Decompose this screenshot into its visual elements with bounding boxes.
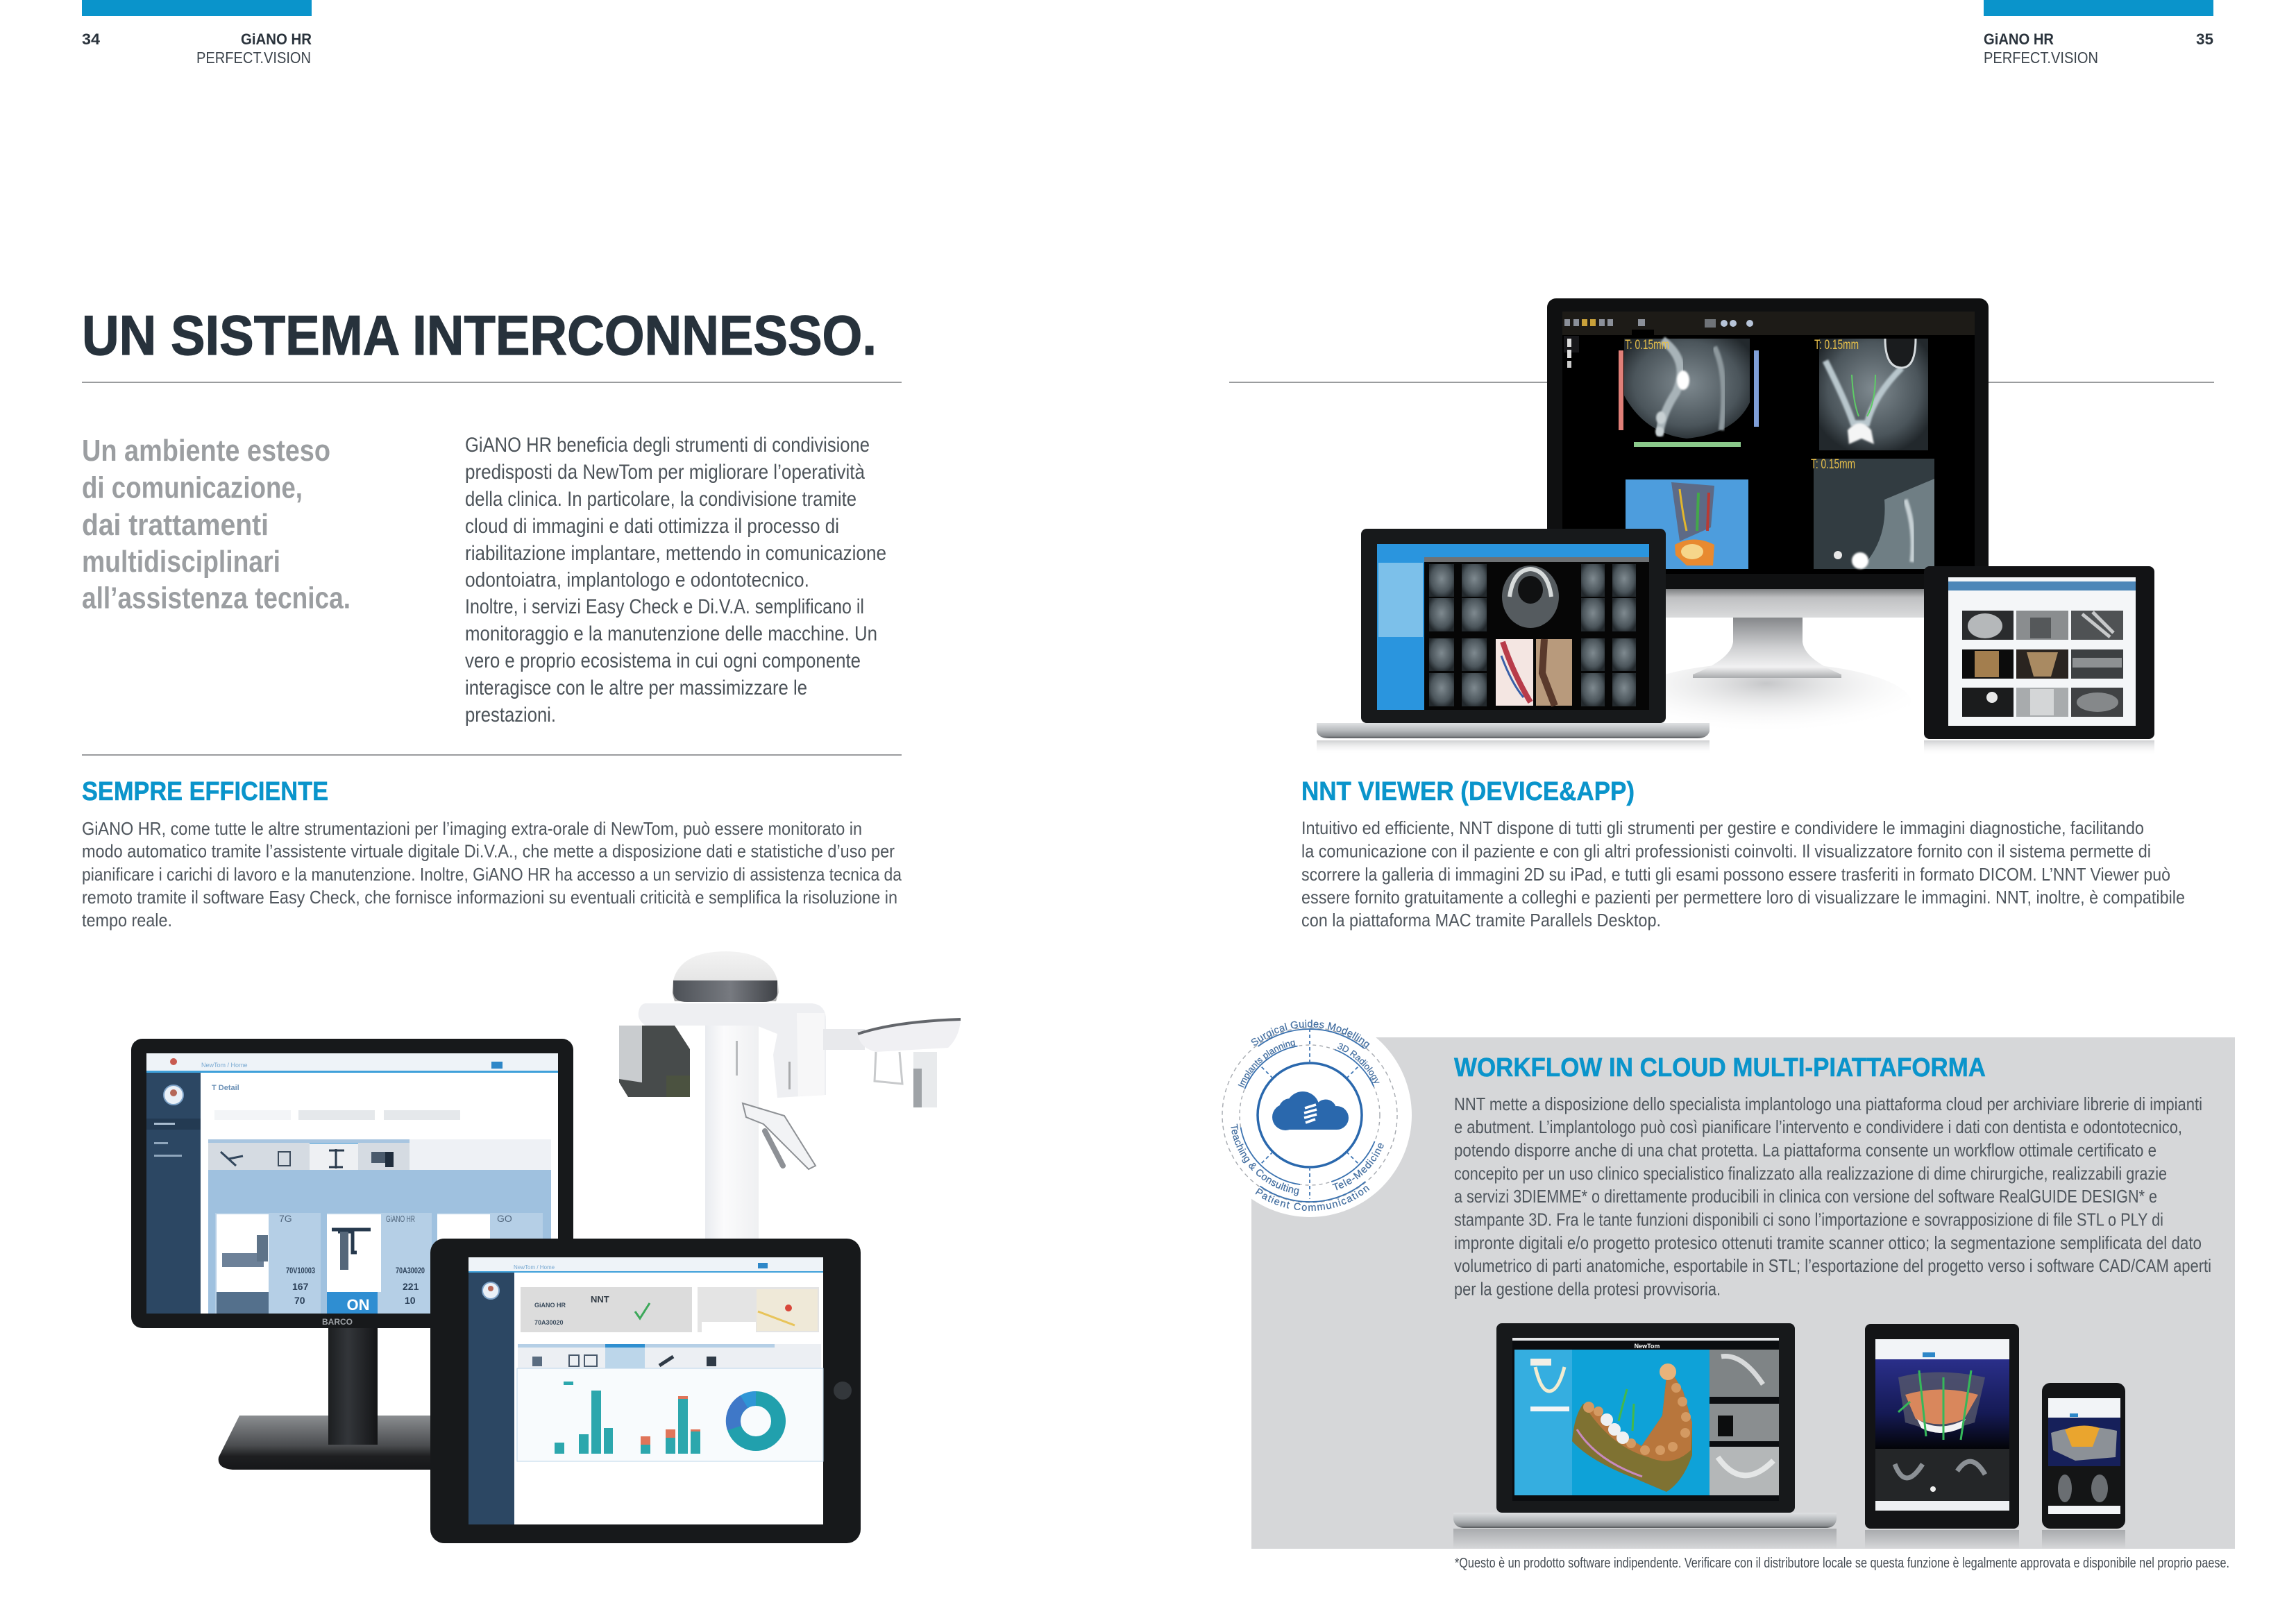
intro text block: della clinica. In particolare, la condivisione tramite (465, 488, 856, 511)
monitor form fields: T Detail (212, 1084, 239, 1092)
text: sempre efficiente: modo automatico tramite l’assistente virtuale digitale Di.V.A., che mette a disposizione dati e statistiche d’uso per (82, 841, 895, 862)
monitor header bar (146, 1053, 558, 1072)
CT sagittal view: T: 0.15mm (1811, 457, 1855, 472)
icon: cloud (1272, 1091, 1349, 1130)
laptop axial scan (1502, 566, 1559, 628)
intro text block: monitoraggio e la manutenzione delle macchine. Un (465, 622, 877, 645)
badge: cloud workflow wheel: Implants planning (1238, 1040, 1295, 1088)
device: tablet with charts: 70A30020 (534, 1319, 564, 1326)
intro text block: vero e proprio ecosistema in cui ogni componente (465, 649, 861, 672)
text: workflow: stampante 3D. Fra le tante funzioni disponibili ci sono l’importazione e sovrapposizione di file STL o PLY di (1454, 1209, 2163, 1230)
device: NNT laptop (1317, 529, 1710, 754)
device: desktop monitor with dashboard: 70V10003 (286, 1266, 315, 1275)
CT coronal view: T: 0.15mm (1814, 338, 1859, 352)
intro text block: GiANO HR beneficia degli strumenti di condivisione (465, 434, 870, 457)
CT side panels (1710, 1350, 1779, 1495)
text: nnt viewer: scorrere la galleria di immagini 2D su iPad, e tutti gli esami possono essere trasferiti in formato DICOM. L’NNT Viewer può (1301, 864, 2170, 885)
tablet x-ray gallery (1962, 611, 2123, 717)
text: sempre efficiente: remoto tramite il software Easy Check, che fornisce informazioni su eventuali criticità e semplifica la risoluzione in (82, 887, 897, 908)
3D tooth render (1626, 479, 1748, 569)
device: tablet with charts (430, 1239, 861, 1543)
intro text block: interagisce con le altre per massimizzare le (465, 677, 807, 699)
text: sempre efficiente: GiANO HR, come tutte le altre strumentazioni per l’imaging extra-orale di NewTom, può essere monitorato in (82, 818, 862, 839)
right page header: PERFECT.VISION (1984, 49, 2098, 67)
text: nnt viewer: Intuitivo ed efficiente, NNT dispone di tutti gli strumenti per gestire e condividere le immagini diagnostiche, facilitando (1301, 817, 2144, 838)
badge: cloud workflow wheel: Tele-Medicine (1332, 1144, 1384, 1191)
device: tablet with charts: NewTom / Home (514, 1264, 555, 1271)
left page header (82, 31, 312, 67)
intro text block: predisposti da NewTom per migliorare l’operatività (465, 461, 865, 484)
intro text block (465, 434, 886, 726)
device: workflow phone (2042, 1383, 2125, 1549)
right page header (1984, 31, 2213, 67)
badge: cloud workflow wheel (1222, 1020, 1412, 1217)
device: NNT tablet (1924, 566, 2154, 756)
device: tablet with charts: NNT (591, 1294, 609, 1305)
right page tab (1984, 0, 2213, 16)
text: nnt viewer: con la piattaforma MAC tramite Parallels Desktop. (1301, 910, 1661, 931)
device: desktop monitor with dashboard: GiANO HR (386, 1214, 415, 1224)
text: sempre efficiente: tempo reale. (82, 910, 172, 931)
lead statement: di comunicazione, (82, 470, 303, 505)
jaw model (1572, 1363, 1692, 1492)
device: workflow laptop (1453, 1323, 1837, 1549)
title: UN SISTEMA INTERCONNESSO. (82, 305, 877, 367)
device: desktop monitor with dashboard: 10 (405, 1295, 416, 1306)
lead statement: multidisciplinari (82, 545, 280, 579)
monitor sidebar (146, 1073, 201, 1314)
text: nnt viewer: la comunicazione con il paziente e con gli altri professionisti coinvolti. Il visualizzatore fornito con il sistema permette di (1301, 841, 2151, 862)
tablet status panels (521, 1287, 692, 1332)
device: NNT desktop monitor (1547, 298, 1989, 746)
text: workflow: per la gestione della protesi provvisoria. (1454, 1278, 1721, 1299)
intro text block: Inoltre, i servizi Easy Check e Di.V.A. semplificano il (465, 595, 864, 618)
device: desktop monitor with dashboard: 221 (403, 1281, 419, 1292)
left page header: 34 (82, 31, 101, 48)
device: desktop monitor with dashboard: ON (347, 1296, 369, 1314)
tablet tabs (518, 1344, 821, 1368)
device: workflow laptop: NewTom (1635, 1343, 1660, 1350)
CT sagittal view (1811, 457, 1934, 569)
monitor toolbar (1562, 312, 1975, 335)
monitor device cards (215, 1213, 321, 1314)
lead statement: Un ambiente esteso (82, 434, 330, 468)
device: desktop monitor with dashboard: NewTom / Home (201, 1062, 248, 1069)
text: sempre efficiente (82, 818, 902, 931)
device: desktop monitor with dashboard: 70A30020 (396, 1266, 425, 1275)
right page header: 35 (2196, 31, 2213, 48)
heading: nnt viewer: NNT VIEWER (DEVICE&APP) (1301, 777, 1635, 806)
right page header: GiANO HR (1984, 31, 2054, 48)
tablet header (469, 1257, 823, 1272)
monitor blue zone (208, 1139, 551, 1314)
intro text block: prestazioni. (465, 704, 556, 726)
CT axial view: T: 0.15mm (1625, 338, 1669, 352)
intro text block: riabilitazione implantare, mettendo in comunicazione (465, 542, 886, 565)
text: nnt viewer: essere fornito gratuitamente a colleghi e pazienti per permettere loro di visualizzare le immagini. NNT, inoltre, è compatibile (1301, 887, 2185, 908)
laptop CT thumbnails (1429, 564, 1636, 706)
intro text block: odontoiatra, implantologo e odontotecnico. (465, 569, 809, 591)
text: nnt viewer (1301, 817, 2185, 931)
monitor side tools (1564, 336, 1579, 352)
device: panoramic x-ray machine (619, 951, 961, 1242)
badge: cloud workflow wheel: 3D Radiology (1337, 1043, 1380, 1083)
tablet donut chart (733, 1398, 779, 1443)
left page tab (82, 0, 312, 16)
laptop anatomy images (1496, 639, 1533, 706)
device: desktop monitor with dashboard (131, 1039, 573, 1470)
text: workflow (1454, 1094, 2211, 1299)
left page header: GiANO HR (241, 31, 312, 48)
lead statement: all’assistenza tecnica. (82, 581, 351, 615)
device: workflow tablet (1865, 1324, 2019, 1549)
intro text block: cloud di immagini e dati ottimizza il processo di (465, 515, 839, 538)
device: desktop monitor with dashboard: 70 (294, 1295, 305, 1306)
tablet sidebar (469, 1273, 514, 1524)
badge: cloud workflow wheel: Patient Communication (1255, 1186, 1370, 1212)
CT axial view (1619, 338, 1759, 447)
panel: workflow in cloud (1222, 1020, 2235, 1549)
text: workflow: a servizi 3DIEMME* o direttamente producibili in clinica con versione del software RealGUIDE DESIGN* e (1454, 1186, 2157, 1207)
CT coronal view (1814, 338, 1928, 450)
heading: workflow: WORKFLOW IN CLOUD MULTI-PIATTAFORMA (1454, 1053, 1986, 1082)
badge: cloud workflow wheel: Surgical Guides Modelling (1251, 1020, 1370, 1049)
tablet bar chart one (555, 1382, 613, 1454)
device: tablet with charts: GiANO HR (534, 1302, 566, 1309)
device: desktop monitor with dashboard: 167 (292, 1281, 309, 1292)
device: desktop monitor with dashboard: GO (497, 1213, 512, 1224)
divider right top (1229, 382, 2214, 383)
text: workflow: potendo disporre anche di una chat protetta. La piattaforma consente un workflow ottimale certificato e (1454, 1139, 2156, 1160)
text: sempre efficiente: pianificare i carichi di lavoro e la manutenzione. Inoltre, GiANO HR ha accesso a un servizio di assistenza tecnica da (82, 864, 902, 885)
text: workflow: e abutment. L’implantologo può così pianificare l’intervento e condividere i dati con dentista e odontotecnico, (1454, 1116, 2182, 1137)
heading: sempre efficiente: SEMPRE EFFICIENTE (82, 777, 328, 806)
tablet bar chart two (641, 1396, 700, 1454)
text: workflow: concepito per un uso clinico specialistico finalizzato alla realizzazione di dime chirurgiche, realizzabili grazie (1454, 1163, 2167, 1184)
left page header: PERFECT.VISION (196, 49, 311, 67)
device: desktop monitor with dashboard: 7G (279, 1213, 292, 1224)
badge: cloud workflow wheel: Teaching & Consulting (1231, 1124, 1299, 1196)
lead statement (82, 434, 351, 615)
lead statement: dai trattamenti (82, 508, 269, 542)
device: desktop monitor with dashboard: BARCO (322, 1317, 353, 1327)
